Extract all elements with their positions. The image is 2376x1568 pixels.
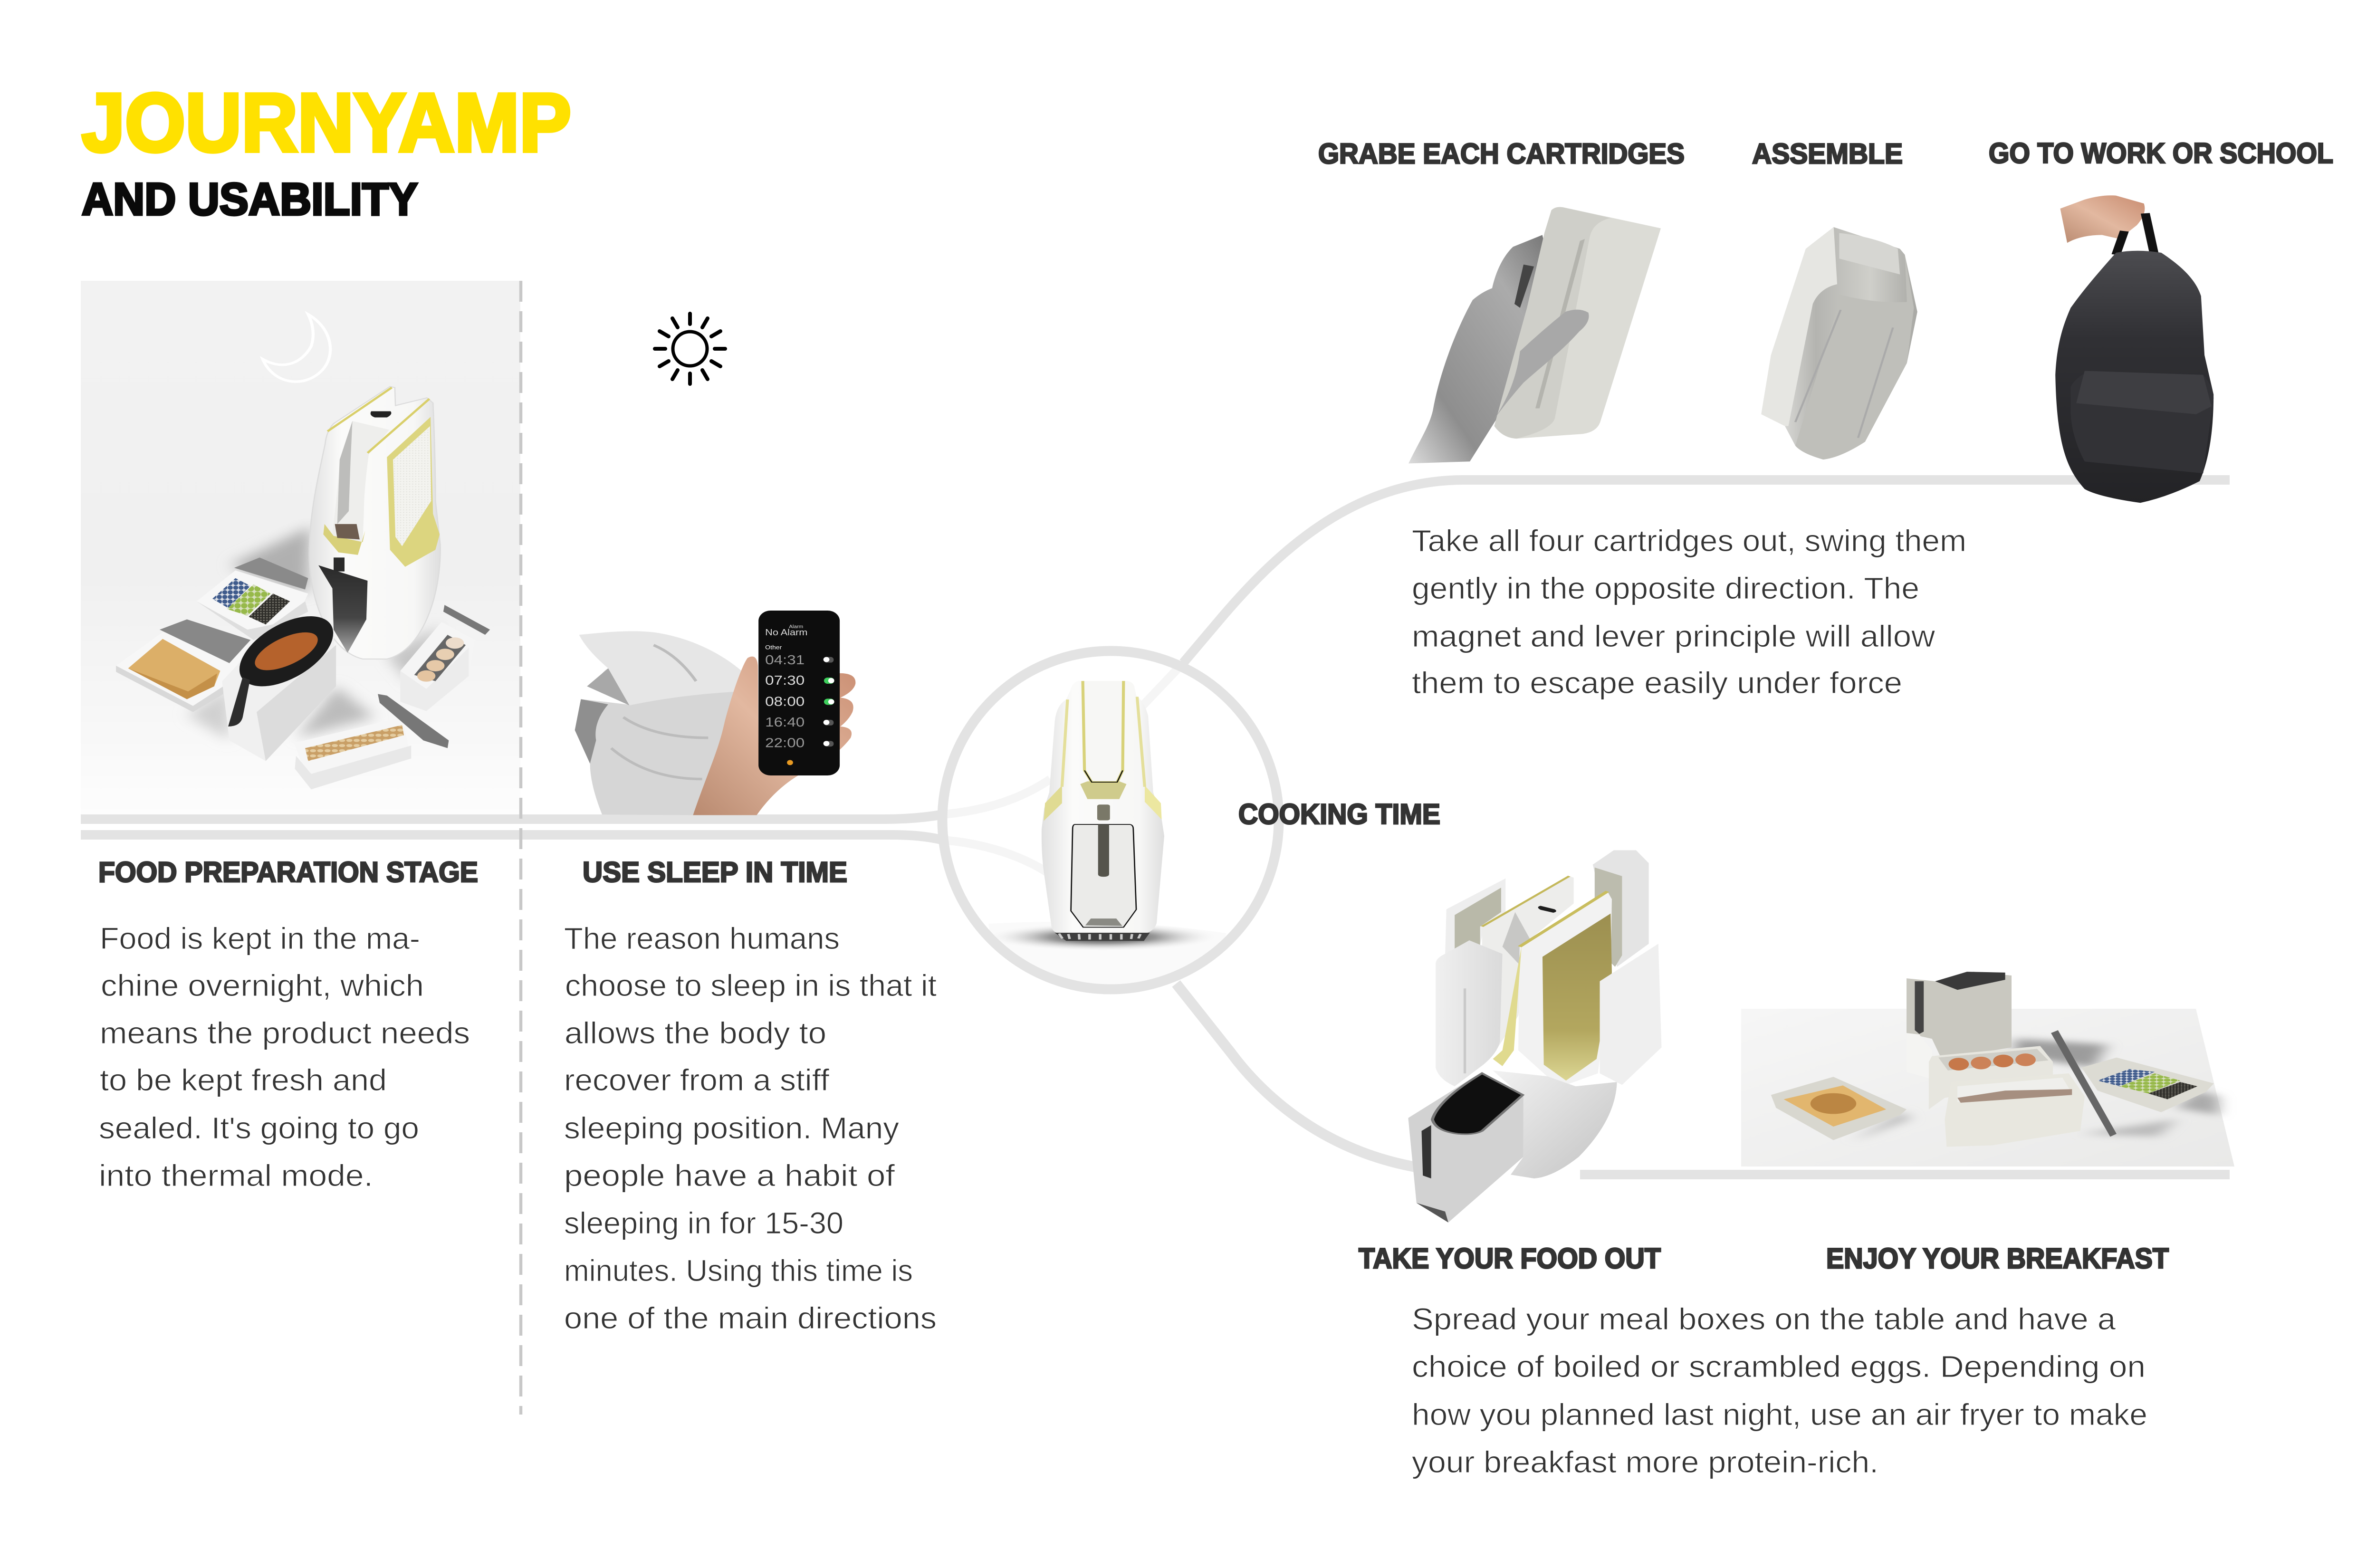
bottom illustrations xyxy=(1408,850,2218,1223)
text block: use sleep in time: people have a habit of xyxy=(564,1158,895,1193)
faint connectors inside the circle xyxy=(943,663,1183,874)
text block: use sleep in time: sleeping in for 15-30 xyxy=(564,1206,843,1240)
phone: 04:31 xyxy=(765,652,805,667)
heading: assemble: ASSEMBLE xyxy=(1752,138,1903,170)
text block: cartridges: Take all four cartridges out, swing them xyxy=(1412,524,1966,558)
heading: grabe each cartridges: GRABE EACH CARTRIDGES xyxy=(1318,138,1685,170)
icon: sun xyxy=(655,314,725,384)
text block: food preparation: sealed. It's going to go xyxy=(99,1111,419,1145)
cartridge: right xyxy=(1600,944,1661,1085)
cartridge: left xyxy=(1436,940,1503,1086)
heading: take your food out: TAKE YOUR FOOD OUT xyxy=(1359,1243,1661,1274)
sleep scene: pillow, hand and phone xyxy=(575,611,855,815)
panel: food preparation product scene xyxy=(116,315,490,789)
heading: food preparation stage: FOOD PREPARATION STAGE xyxy=(98,856,478,888)
phone: No Alarm xyxy=(765,628,807,638)
text block: food preparation: into thermal mode. xyxy=(99,1158,373,1193)
jar xyxy=(1907,972,2012,1079)
phone: 16:40 xyxy=(765,714,805,729)
text block: food preparation: means the product needs xyxy=(100,1016,470,1050)
top row illustrations xyxy=(1408,195,2213,503)
headings xyxy=(98,137,2333,1274)
heading: use sleep in time: USE SLEEP IN TIME xyxy=(583,856,847,888)
text block: food preparation: Food is kept in the ma- xyxy=(100,921,420,956)
text block: cartridges: magnet and lever principle will allow xyxy=(1412,619,1935,653)
lower horizontal rail xyxy=(1580,1170,2230,1179)
text block: breakfast: choice of boiled or scrambled eggs. Depending on xyxy=(1412,1349,2146,1384)
upper branch rail xyxy=(1183,480,2230,663)
lid xyxy=(2051,1030,2117,1137)
text block: use sleep in time: minutes. Using this time is xyxy=(564,1253,913,1288)
text block: use sleep in time: allows the body to xyxy=(565,1016,826,1050)
subtitle: AND USABILITY xyxy=(82,174,418,225)
fruit tray xyxy=(197,557,308,640)
heading: go to work or school: GO TO WORK OR SCHOOL xyxy=(1989,137,2333,169)
toast tray xyxy=(116,619,250,712)
heading: enjoy your breakfast: ENJOY YOUR BREAKFAST xyxy=(1826,1243,2169,1274)
text block: food preparation: chine overnight, which xyxy=(101,968,424,1003)
text block: breakfast: Spread your meal boxes on the table and have a xyxy=(1412,1302,2116,1336)
table shadows xyxy=(1852,1039,2218,1141)
assembled cartridge xyxy=(1761,227,1917,459)
machine xyxy=(309,386,441,659)
title: JOURNYAMP xyxy=(82,76,571,169)
open drawer xyxy=(1408,1072,1523,1223)
lower branch rail xyxy=(1176,984,1421,1168)
icon: moon xyxy=(263,315,330,382)
text block: use sleep in time: choose to sleep in is that it xyxy=(565,968,937,1003)
text block: use sleep in time: sleeping position. Many xyxy=(564,1111,899,1145)
text block: use sleep in time: one of the main directions xyxy=(564,1301,937,1335)
shadows xyxy=(187,526,441,740)
text block: cartridges xyxy=(1412,524,1966,700)
fruit tray xyxy=(2081,1058,2214,1112)
text block: use sleep in time: recover from a stiff xyxy=(564,1063,829,1097)
phone: 08:00 xyxy=(765,694,805,709)
text block: use sleep in time: The reason humans xyxy=(564,921,840,956)
phone: 07:30 xyxy=(765,673,805,688)
bedding xyxy=(575,631,745,815)
text block: breakfast: your breakfast more protein-rich. xyxy=(1412,1445,1878,1479)
text block: breakfast xyxy=(1412,1302,2147,1479)
heading: cooking time: COOKING TIME xyxy=(1238,798,1440,830)
phone: 22:00 xyxy=(765,735,805,750)
panel: night background xyxy=(81,281,520,815)
floor shadow xyxy=(984,922,1226,993)
text block: cartridges: gently in the opposite direction. The xyxy=(1412,571,1919,605)
oat box xyxy=(1945,1073,2085,1147)
egg box xyxy=(1929,1046,2053,1109)
breakfast table surface xyxy=(1741,1009,2234,1166)
left rails to the circle xyxy=(81,814,943,840)
egg box xyxy=(400,605,490,711)
toast tray xyxy=(1771,1077,1907,1140)
hand holding cartridge xyxy=(1408,207,1661,463)
hand and backpack xyxy=(2055,195,2213,503)
hand xyxy=(693,657,855,815)
product front view xyxy=(1042,681,1164,941)
ring xyxy=(942,651,1279,989)
text block: breakfast: how you planned last night, use an air fryer to make xyxy=(1412,1397,2147,1432)
phone: Other xyxy=(765,644,782,650)
text block: cartridges: them to escape easily under force xyxy=(1412,666,1902,700)
dashed divider xyxy=(519,281,522,1415)
text block: food preparation: to be kept fresh and xyxy=(100,1063,387,1097)
text block: use sleep in time xyxy=(564,921,937,1335)
central circle with product xyxy=(942,651,1279,993)
phone xyxy=(758,611,840,775)
exploded machine xyxy=(1445,850,1649,1178)
air fryer drawer xyxy=(222,602,348,761)
oat box xyxy=(294,694,449,789)
text block: food preparation xyxy=(99,921,470,1193)
phone: Alarm xyxy=(789,624,803,630)
